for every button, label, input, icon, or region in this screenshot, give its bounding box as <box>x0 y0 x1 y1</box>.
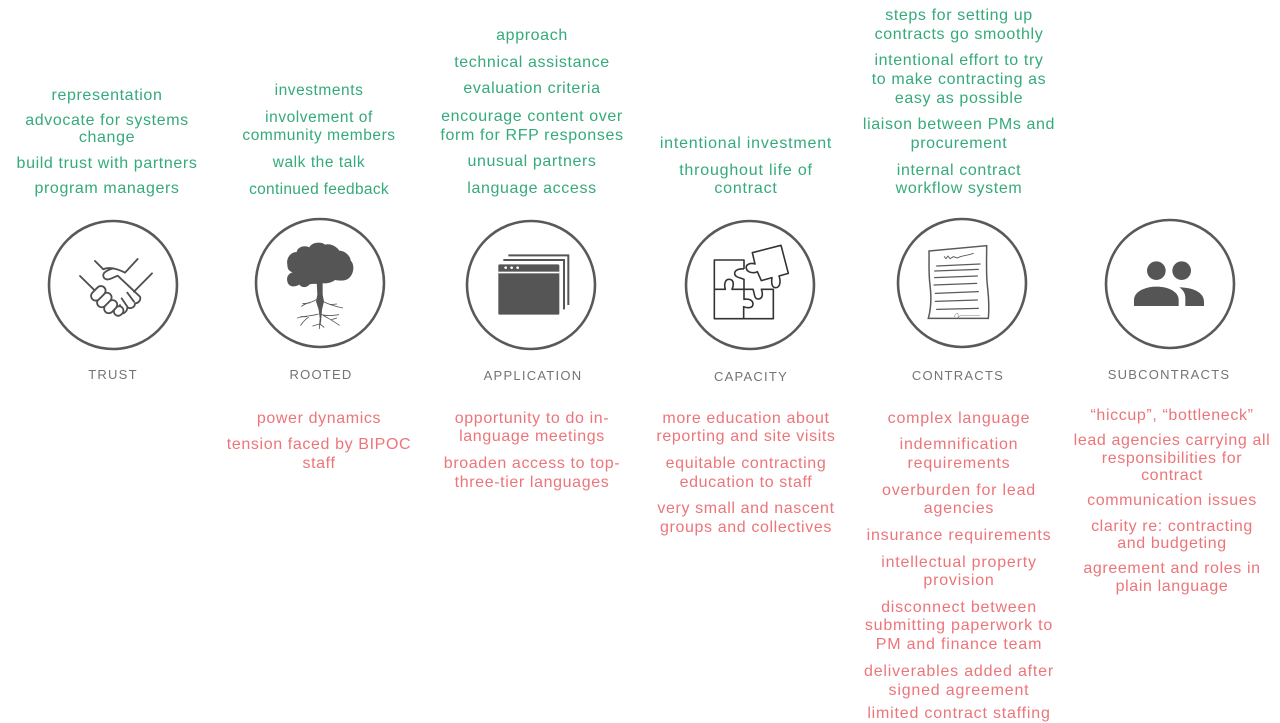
label: contracts: CONTRACTS <box>912 368 1004 383</box>
challenges text: contracts <box>864 410 1054 722</box>
strengths text: application: technical assistance <box>454 54 610 71</box>
challenges text: capacity: more education about <box>662 410 830 427</box>
challenges text: contracts: deliverables added after <box>864 663 1054 680</box>
challenges text: subcontracts: communication issues <box>1087 492 1257 509</box>
strengths text: trust: change <box>79 129 135 146</box>
strengths text: application: unusual partners <box>467 153 597 170</box>
challenges text: subcontracts: lead agencies carrying all <box>1074 432 1270 449</box>
strengths text: application: approach <box>496 27 568 44</box>
challenges text: rooted: staff <box>302 455 336 472</box>
strengths text: trust: advocate for systems <box>25 112 189 129</box>
strengths text: trust: representation <box>52 87 162 104</box>
strengths text: contracts: internal contract <box>897 162 1021 179</box>
strengths text: rooted: investments <box>275 82 363 99</box>
challenges text: contracts: provision <box>923 572 995 589</box>
strengths text: capacity: contract <box>714 180 778 197</box>
challenges text: subcontracts: agreement and roles in <box>1083 560 1261 577</box>
challenges text: subcontracts: plain language <box>1116 578 1228 595</box>
icon: subcontracts people <box>1106 220 1234 348</box>
challenges text: contracts: requirements <box>908 455 1010 472</box>
challenges text: contracts: complex language <box>888 410 1030 427</box>
strengths text: contracts: to make contracting as <box>872 71 1046 88</box>
challenges text: application: language meetings <box>459 428 605 445</box>
strengths text: application: encourage content over <box>441 108 623 125</box>
strengths text: contracts: liaison between PMs and <box>863 116 1055 133</box>
challenges text: contracts: intellectual property <box>881 554 1037 571</box>
challenges text: subcontracts: and budgeting <box>1117 535 1227 552</box>
challenges text: capacity: equitable contracting <box>666 455 826 472</box>
challenges text: application: broaden access to top- <box>444 455 620 472</box>
strengths text: contracts: contracts go smoothly <box>875 26 1043 43</box>
strengths text: contracts: easy as possible <box>895 90 1023 107</box>
challenges text: subcontracts: contract <box>1141 467 1203 484</box>
challenges text: rooted <box>227 410 411 472</box>
strengths text: trust: program managers <box>34 180 180 197</box>
challenges text: capacity: groups and collectives <box>660 519 832 536</box>
icon: trust handshake <box>49 221 177 349</box>
strengths text: rooted: walk the talk <box>273 154 365 171</box>
label: capacity: CAPACITY <box>714 369 788 384</box>
challenges text: contracts: indemnification <box>900 436 1018 453</box>
challenges text: application <box>444 410 620 491</box>
strengths text: contracts <box>863 7 1055 197</box>
challenges text: application: three-tier languages <box>455 474 609 491</box>
strengths text: application: form for RFP responses <box>440 127 624 144</box>
strengths text: rooted: involvement of <box>265 109 373 126</box>
strengths text: application: evaluation criteria <box>463 80 601 97</box>
challenges text: contracts: disconnect between <box>881 599 1037 616</box>
challenges text: contracts: PM and finance team <box>876 636 1042 653</box>
strengths text: rooted <box>242 82 396 198</box>
challenges text: capacity: reporting and site visits <box>656 428 836 445</box>
strengths text: capacity <box>660 135 832 197</box>
strengths text: trust <box>17 87 197 197</box>
strengths text: contracts: steps for setting up <box>885 7 1033 24</box>
challenges text: contracts: submitting paperwork to <box>865 617 1053 634</box>
strengths text: rooted: continued feedback <box>249 181 389 198</box>
challenges text: subcontracts: responsibilities for <box>1102 450 1242 467</box>
strengths text: application: language access <box>467 180 597 197</box>
challenges text: contracts: limited contract staffing <box>867 705 1051 722</box>
challenges text: subcontracts: clarity re: contracting <box>1091 518 1253 535</box>
challenges text: contracts: overburden for lead <box>882 482 1036 499</box>
strengths text: capacity: intentional investment <box>660 135 832 152</box>
challenges text: capacity: very small and nascent <box>657 500 835 517</box>
icon: capacity puzzle <box>686 221 814 349</box>
challenges text: rooted: tension faced by BIPOC <box>227 436 411 453</box>
challenges text: contracts: insurance requirements <box>867 527 1051 544</box>
challenges text: rooted: power dynamics <box>257 410 381 427</box>
strengths text: contracts: procurement <box>911 135 1007 152</box>
label: subcontracts: SUBCONTRACTS <box>1108 367 1230 382</box>
strengths text: trust: build trust with partners <box>17 155 197 172</box>
challenges text: capacity <box>656 410 836 536</box>
challenges text: contracts: agencies <box>924 500 994 517</box>
challenges text: subcontracts <box>1074 407 1270 595</box>
icon: application windows <box>467 221 595 349</box>
strengths text: application <box>440 27 624 197</box>
icon: rooted tree <box>256 219 384 347</box>
challenges text: capacity: education to staff <box>680 474 812 491</box>
challenges text: application: opportunity to do in- <box>455 410 609 427</box>
icon: contract document <box>898 219 1026 347</box>
label: rooted: ROOTED <box>289 367 353 382</box>
label: application: APPLICATION <box>484 368 582 383</box>
challenges text: subcontracts: “hiccup”, “bottleneck” <box>1090 407 1254 424</box>
label: trust: TRUST <box>88 367 138 382</box>
strengths text: contracts: intentional effort to try <box>874 52 1044 69</box>
strengths text: rooted: community members <box>242 127 396 144</box>
challenges text: contracts: signed agreement <box>889 682 1029 699</box>
strengths text: capacity: throughout life of <box>679 162 813 179</box>
strengths text: contracts: workflow system <box>896 180 1022 197</box>
